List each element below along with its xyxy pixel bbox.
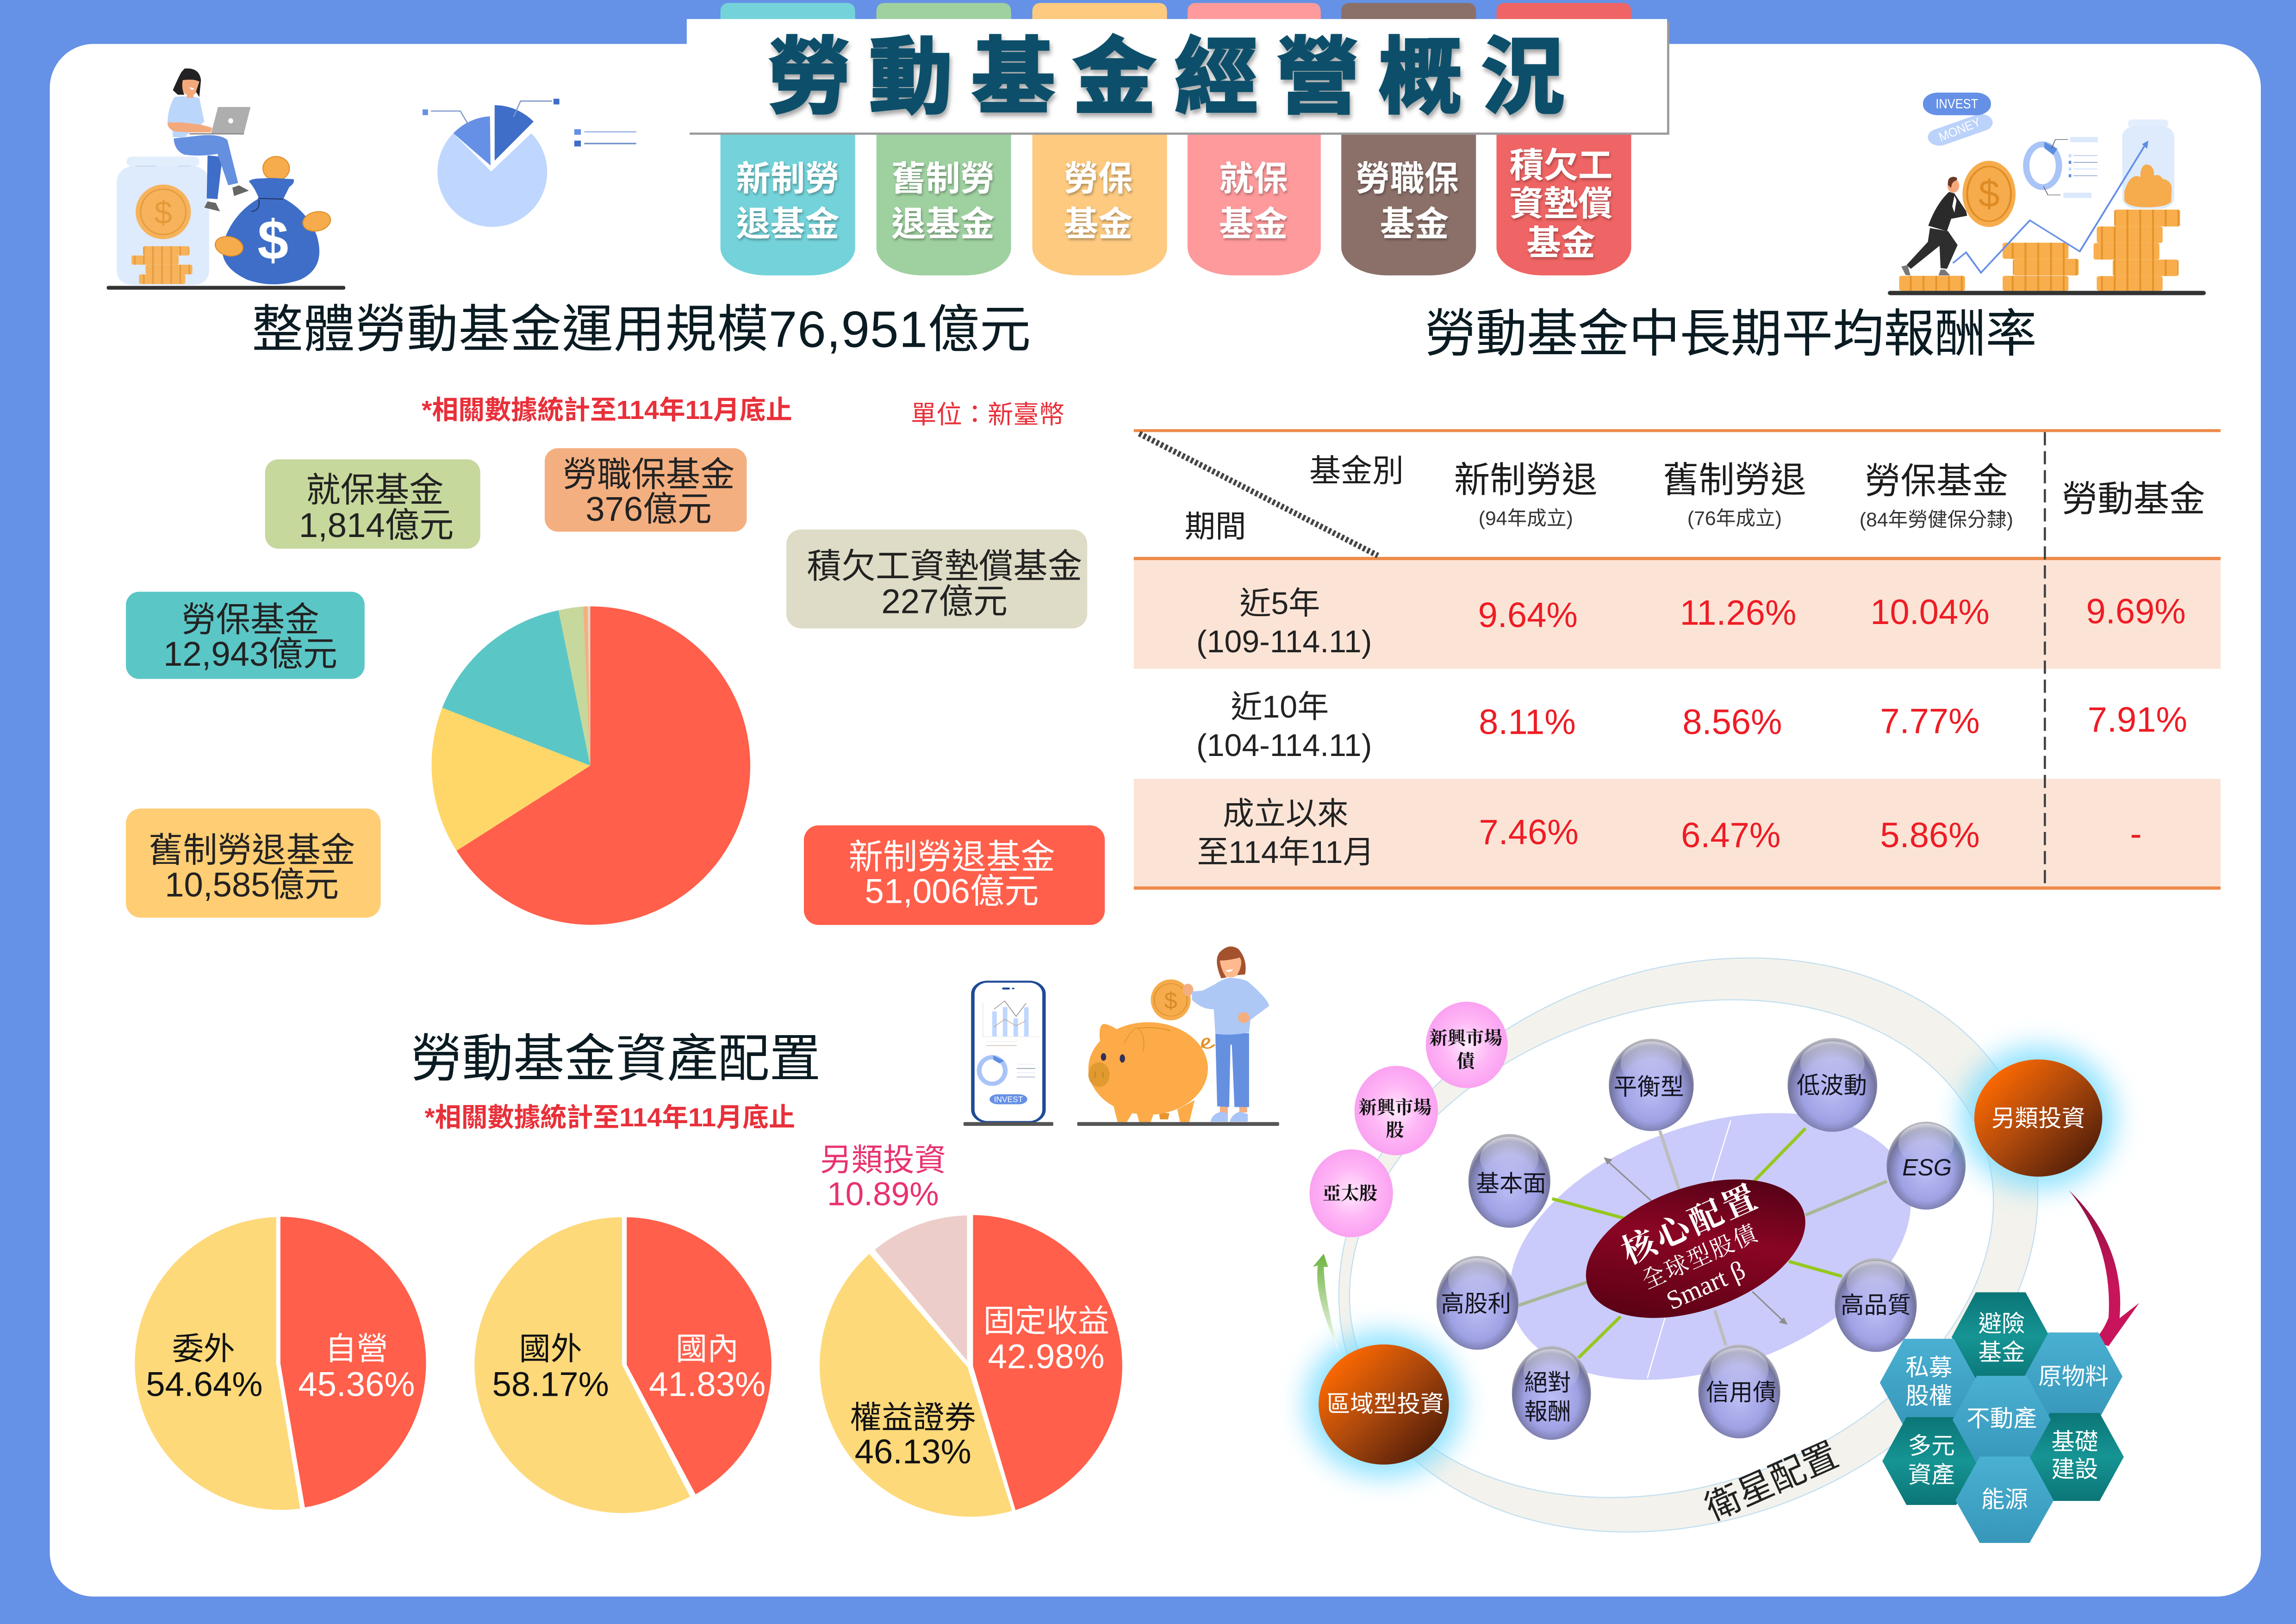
table row: 近5年: 近5年 — [1239, 586, 1320, 621]
legend box: 積欠工資墊償基金: 227億元 — [881, 582, 1008, 620]
table row: 成立以來: 6.47% — [1681, 816, 1780, 855]
arrow: green upward — [1313, 1254, 1339, 1352]
illustration: small pie icon — [423, 99, 636, 227]
hex: 私募股權: 私募 — [1905, 1354, 1952, 1380]
tab: 就保基金: 就保 — [1219, 160, 1288, 198]
sphere: ESG — [1886, 1122, 1966, 1210]
table row: 近10年: 8.11% — [1479, 702, 1576, 742]
fund category tabs — [721, 3, 1631, 275]
ball: 另類投資: 另類投資 — [1991, 1105, 2085, 1131]
label: alternative investments — [820, 1143, 946, 1213]
core ellipse: Smart β — [1662, 1255, 1750, 1316]
legend box: 舊制勞退基金 — [126, 808, 381, 918]
sphere: ESG: ESG — [1902, 1154, 1952, 1181]
sphere: 高品質 — [1835, 1258, 1917, 1352]
hex: 不動產: 不動產 — [1966, 1405, 2037, 1432]
hex: 避險基金 — [1952, 1293, 2050, 1382]
legend box: 就保基金: 1,814億元 — [299, 506, 454, 544]
tab: 舊制勞退基金: 退基金 — [891, 205, 995, 244]
label: alternative investments: 10.89% — [827, 1176, 939, 1213]
label: alternative investments: 另類投資 — [820, 1143, 946, 1178]
sphere: 信用債: 信用債 — [1706, 1379, 1776, 1405]
pie chart: domestic vs foreign: 國外 — [519, 1331, 582, 1367]
tab: 新制勞退基金 — [721, 3, 855, 275]
pie chart: asset classes: 權益證券 — [850, 1400, 976, 1436]
hex: 能源: 能源 — [1981, 1486, 2028, 1512]
pie chart: domestic vs foreign: 58.17% — [492, 1365, 609, 1403]
table header row: 舊制勞退 — [1663, 460, 1806, 500]
sphere: 高股利: 高股利 — [1441, 1290, 1511, 1317]
hex: 原物料 — [2024, 1332, 2122, 1420]
table row: 近5年: 11.26% — [1680, 593, 1796, 633]
bubble: 新興市場股: 新興市場 — [1358, 1098, 1431, 1118]
legend box: 舊制勞退基金: 10,585億元 — [165, 866, 339, 904]
table row: 成立以來: 7.46% — [1479, 813, 1579, 852]
heading: total fund size: 整體勞動基金運用規模76,951億元 — [252, 301, 1031, 358]
heading: asset allocation: 勞動基金資產配置 — [411, 1031, 821, 1087]
pie chart: fund size — [431, 606, 750, 925]
tab: 勞職保基金: 勞職保 — [1356, 160, 1459, 198]
legend box: 就保基金 — [265, 459, 480, 549]
sphere: 絕對報酬: 報酬 — [1524, 1399, 1571, 1425]
sphere: 平衡型: 平衡型 — [1614, 1074, 1684, 1100]
sphere: 絕對報酬 — [1512, 1346, 1591, 1440]
table row: 成立以來: 成立以來 — [1223, 796, 1349, 831]
pie chart: domestic vs foreign — [474, 1217, 772, 1513]
tab: 積欠工資墊償基金: 資墊償 — [1509, 184, 1612, 223]
satellite label: 衛星配置 — [1699, 1435, 1844, 1528]
illustration: investor pushing coin up chart — [1888, 93, 2206, 295]
arrow: crimson downward — [2069, 1190, 2139, 1346]
illustration: piggy bank with woman — [1077, 947, 1279, 1126]
note: data date: *相關數據統計至114年11月底止 — [422, 395, 792, 425]
hex: 多元資產 — [1882, 1417, 1980, 1505]
legend box: 積欠工資墊償基金 — [786, 530, 1087, 628]
table header row — [1185, 454, 2205, 544]
table header row: 勞動基金 — [2062, 479, 2205, 519]
table header row: 基金別 — [1309, 454, 1404, 489]
sphere: 高股利 — [1437, 1256, 1518, 1350]
legend box: 就保基金: 就保基金 — [306, 471, 444, 509]
tab: 就保基金 — [1188, 3, 1321, 275]
illustration: phone with invest app: INVEST — [994, 1095, 1023, 1104]
table row: 近5年: 10.04% — [1870, 593, 1990, 632]
pie chart: asset classes: 46.13% — [855, 1432, 971, 1471]
legend box: 積欠工資墊償基金: 積欠工資墊償基金 — [807, 547, 1082, 585]
table header row: 勞保基金 — [1865, 461, 2008, 501]
tab: 勞保基金: 基金 — [1064, 205, 1132, 244]
table header row: (94年成立) — [1479, 507, 1573, 530]
pie chart: asset classes — [820, 1143, 1122, 1517]
pie chart: self-managed vs outsourced: 委外 — [172, 1331, 235, 1367]
tab: 勞保基金 — [1033, 3, 1167, 275]
table row: 近10年: 8.56% — [1682, 702, 1782, 742]
hex: 基礎建設: 基礎 — [2051, 1429, 2098, 1455]
hex: 多元資產: 多元 — [1908, 1432, 1955, 1459]
hex: 不動產 — [1953, 1376, 2051, 1464]
pie chart: asset classes: 42.98% — [988, 1337, 1105, 1375]
table row: 成立以來: 至114年11月 — [1197, 835, 1374, 870]
legend box: 勞保基金: 12,943億元 — [163, 635, 337, 673]
title banner — [687, 19, 1669, 135]
illustration: woman on jar with money bag — [107, 69, 345, 290]
legend box: 新制勞退基金: 新制勞退基金 — [849, 837, 1055, 876]
hex: 避險基金: 基金 — [1978, 1339, 2025, 1366]
hex: 多元資產: 資產 — [1908, 1462, 1955, 1488]
tab: 舊制勞退基金 — [877, 3, 1011, 275]
legend box: 勞保基金: 勞保基金 — [181, 600, 319, 639]
hex: 私募股權: 股權 — [1905, 1383, 1952, 1409]
illustration: phone with invest app — [964, 982, 1053, 1126]
tab: 積欠工資墊償基金: 積欠工 — [1509, 146, 1612, 185]
tab: 積欠工資墊償基金 — [1497, 3, 1631, 275]
ball: 區域型投資: 區域型投資 — [1327, 1391, 1444, 1417]
sphere: 信用債 — [1698, 1344, 1780, 1438]
table row: 近5年 — [1196, 586, 2186, 659]
tab: 新制勞退基金: 新制勞 — [736, 160, 840, 198]
pie chart: domestic vs foreign: 國內 — [676, 1331, 739, 1367]
tab: 勞職保基金 — [1341, 3, 1476, 275]
bubble: 新興市場股: 股 — [1386, 1120, 1404, 1141]
core ellipse: 核心配置 — [1616, 1177, 1765, 1271]
ball: 區域型投資 — [1305, 1331, 1463, 1478]
hex: 原物料: 原物料 — [2038, 1363, 2109, 1390]
bubble: 亞太股 — [1309, 1149, 1393, 1237]
legend box: 勞職保基金 — [545, 448, 747, 532]
table row: 近5年: 9.69% — [2086, 592, 2186, 631]
bubble: 新興市場債: 債 — [1456, 1051, 1477, 1072]
icon: money tag text: MONEY — [1937, 115, 1983, 144]
illustration: woman on jar with money bag: $ — [154, 194, 172, 231]
table row: 成立以來: - — [2130, 814, 2142, 854]
table: average returns — [1134, 429, 2221, 890]
core ellipse: 全球型股債 — [1638, 1219, 1762, 1294]
legend box: 新制勞退基金 — [804, 825, 1105, 925]
sphere: 絕對報酬: 絕對 — [1524, 1369, 1571, 1396]
ball: 另類投資 — [1960, 1046, 2116, 1190]
illustration: piggy bank with woman: $ — [1164, 987, 1177, 1013]
pie chart: self-managed vs outsourced — [135, 1217, 426, 1510]
connector lines — [1518, 1128, 1887, 1358]
bubble: 新興市場股 — [1355, 1066, 1438, 1155]
tab: 積欠工資墊償基金: 基金 — [1526, 224, 1595, 262]
core field ellipse — [1474, 1064, 1947, 1429]
sphere: 高品質: 高品質 — [1841, 1292, 1911, 1318]
table row: 近10年 — [1196, 689, 2187, 763]
hex: 基礎建設: 建設 — [2051, 1456, 2098, 1482]
table row: 近10年: 7.91% — [2088, 700, 2187, 740]
hex: 基礎建設 — [2026, 1413, 2124, 1501]
sphere: 低波動 — [1787, 1038, 1877, 1132]
note: unit: 單位：新臺幣 — [911, 400, 1064, 429]
sphere: 平衡型 — [1609, 1039, 1694, 1131]
title: 勞動基金經營概況 — [768, 31, 1565, 124]
table row: 成立以來: 5.86% — [1880, 816, 1980, 855]
tab: 勞保基金: 勞保 — [1064, 160, 1132, 198]
tab: 就保基金: 基金 — [1219, 205, 1288, 244]
pie chart: self-managed vs outsourced: 自營 — [325, 1331, 388, 1367]
bubble: 新興市場債 — [1426, 1002, 1508, 1088]
legend box: 舊制勞退基金: 舊制勞退基金 — [149, 831, 355, 869]
pie chart: self-managed vs outsourced: 54.64% — [146, 1365, 262, 1403]
table header row: (84年勞健保分隸) — [1860, 509, 2013, 531]
pie chart: domestic vs foreign: 41.83% — [649, 1365, 765, 1403]
diagram: core satellite allocation — [1256, 861, 2139, 1624]
hex: 避險基金: 避險 — [1978, 1310, 2025, 1337]
hexagon cluster — [1880, 1293, 2124, 1543]
illustration: investor pushing coin up chart: $ — [1979, 173, 2000, 215]
pie chart: self-managed vs outsourced: 45.36% — [298, 1365, 415, 1403]
note: asset data date: *相關數據統計至114年11月底止 — [425, 1103, 795, 1132]
legend box: 新制勞退基金: 51,006億元 — [865, 872, 1039, 911]
hex: 私募股權 — [1880, 1339, 1978, 1427]
table row: 近5年: (109-114.11) — [1196, 624, 1372, 659]
table header row: (76年成立) — [1687, 507, 1782, 530]
sphere: 基本面 — [1468, 1134, 1550, 1228]
satellite ring — [1256, 861, 2121, 1624]
illustration: woman on jar with money bag: $ — [257, 209, 288, 271]
table row: 成立以來 — [1197, 796, 2142, 870]
legend box: 勞職保基金: 376億元 — [585, 490, 712, 528]
table header row: 期間 — [1185, 510, 1246, 544]
tab: 新制勞退基金: 退基金 — [736, 205, 840, 244]
bubble: 亞太股: 亞太股 — [1323, 1184, 1377, 1204]
legend box: 勞保基金 — [126, 592, 365, 679]
pie chart: asset classes: 固定收益 — [983, 1304, 1109, 1339]
sphere: 基本面: 基本面 — [1476, 1170, 1546, 1197]
core ellipse — [1568, 1153, 1824, 1344]
table header row: 新制勞退 — [1454, 460, 1598, 500]
icon: invest tag text: INVEST — [1935, 97, 1978, 112]
sphere: 低波動: 低波動 — [1797, 1072, 1867, 1099]
hex: 能源 — [1955, 1456, 2053, 1543]
table row: 近10年: (104-114.11) — [1196, 728, 1372, 763]
legend box: 勞職保基金: 勞職保基金 — [563, 456, 734, 494]
tab: 舊制勞退基金: 舊制勞 — [891, 160, 995, 198]
tab: 勞職保基金: 基金 — [1380, 205, 1449, 244]
table row: 近5年: 9.64% — [1478, 595, 1578, 635]
bubble: 新興市場債: 新興市場 — [1429, 1028, 1502, 1049]
table row: 近10年: 近10年 — [1231, 689, 1329, 725]
heading: medium and long term return: 勞動基金中長期平均報酬率 — [1425, 306, 2037, 362]
table row: 近10年: 7.77% — [1880, 702, 1980, 741]
